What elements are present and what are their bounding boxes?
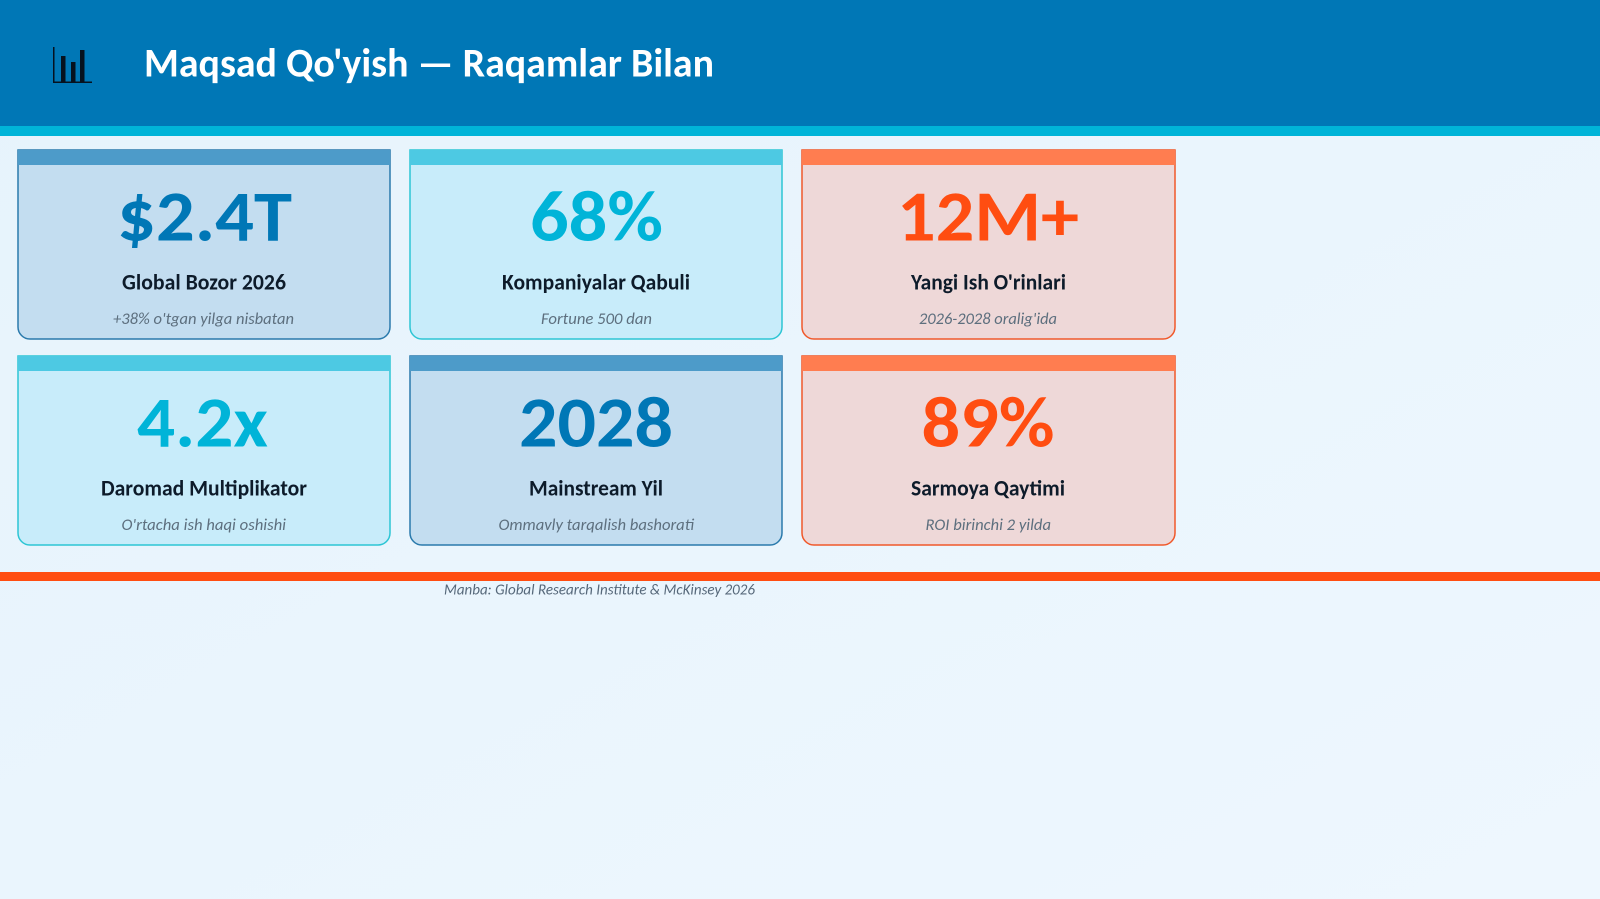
note: ROI birinchi 2 yilda [926, 516, 1051, 535]
panel: Daromad Multiplikator [18, 356, 390, 545]
statistic: $2.4T [117, 172, 292, 260]
label: Daromad Multiplikator [101, 474, 307, 502]
note: O'rtacha ish haqi oshishi [122, 516, 286, 535]
statistic: 2028 [519, 378, 673, 466]
source note: Manba: Global Research Institute & McKinsey 2026 [444, 582, 755, 600]
title: Maqsad Qo'yish — Raqamlar Bilan [144, 38, 714, 88]
footer accent bar [0, 572, 1600, 581]
note: Fortune 500 dan [541, 310, 652, 329]
note: +38% o'tgan yilga nisbatan [113, 310, 294, 329]
label: Mainstream Yil [529, 474, 663, 502]
icon: bar chart [53, 47, 92, 83]
statistic: 4.2x [137, 378, 268, 466]
panel: Kompaniyalar Qabuli [410, 150, 782, 339]
statistic: 12M+ [897, 172, 1079, 260]
statistic: 89% [922, 378, 1054, 466]
panel: Mainstream Yil [410, 356, 782, 545]
label: Kompaniyalar Qabuli [502, 268, 690, 296]
panel: Sarmoya Qaytimi [802, 356, 1175, 545]
label: Global Bozor 2026 [122, 268, 286, 296]
note: Ommavly tarqalish bashorati [498, 516, 695, 535]
statistic: 68% [530, 172, 663, 260]
panel: Yangi Ish O'rinlari [802, 150, 1175, 339]
panel: Global Bozor 2026 [18, 150, 390, 339]
label: Sarmoya Qaytimi [911, 474, 1065, 502]
header banner [0, 0, 1600, 136]
note: 2026-2028 oralig'ida [919, 310, 1057, 329]
label: Yangi Ish O'rinlari [910, 268, 1066, 296]
